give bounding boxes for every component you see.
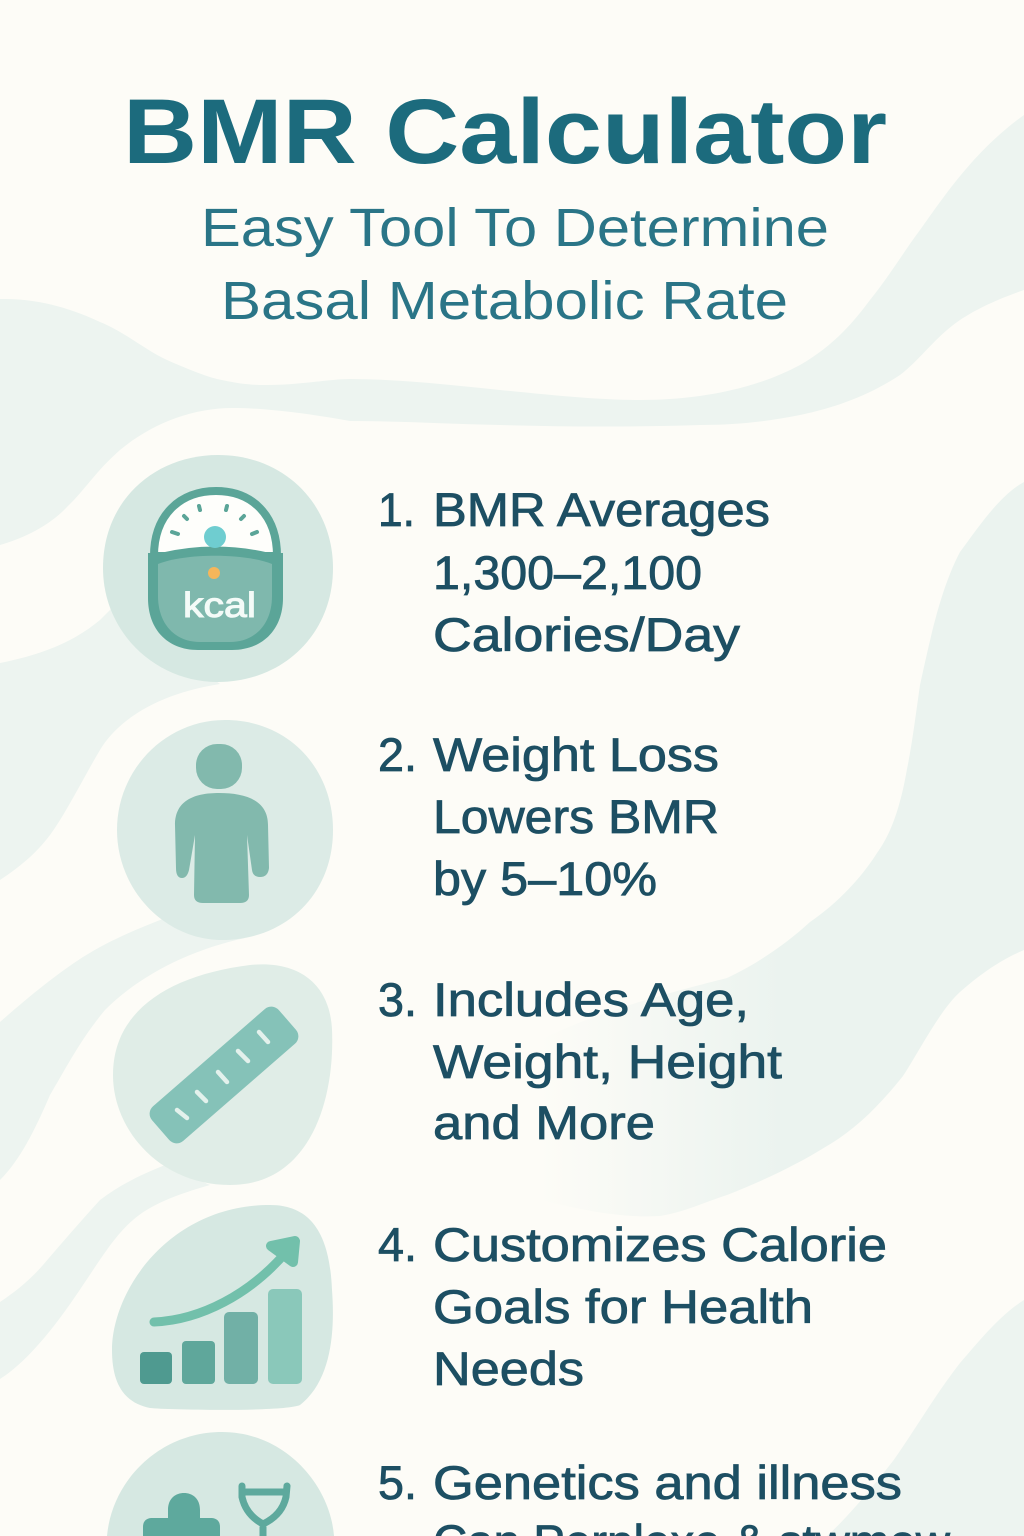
icon: kcal scale [103,455,333,682]
item 2 text [378,728,719,905]
item 1 text [378,483,770,661]
icon: medical cross and stethoscope [107,1432,334,1536]
item 5 text [378,1456,951,1536]
item 1 text: 1,300–2,100 [433,546,702,599]
item 2 text: Lowers BMR [433,790,719,843]
icon: rising bar chart [112,1205,333,1410]
item 4 text: Goals for Health [433,1280,813,1333]
item 1 text: BMR Averages [433,483,770,536]
item 3 text [378,973,782,1149]
subtitle: Basal Metabolic Rate [221,271,788,331]
icon: ruler [113,964,332,1185]
item 3 text: 3. [378,973,417,1026]
item 3 text: and More [433,1096,655,1149]
item 3 text: Includes Age, [433,973,749,1026]
icon: kcal scale: kcal [183,586,256,625]
item 4 text: Customizes Calorie [433,1218,887,1271]
item 4 text: Needs [433,1342,584,1395]
subtitle: Easy Tool To Determine [201,198,829,258]
item 5 text: Genetics and illness [433,1456,902,1509]
item 4 text [378,1218,887,1395]
item 2 text: by 5–10% [433,852,657,905]
icon: person [117,720,333,940]
item 5 text: 5. [378,1456,417,1509]
title: BMR Calculator [123,81,887,183]
item 2 text: Weight Loss [433,728,719,781]
subtitle [201,198,829,331]
item 1 text: 1. [378,483,415,536]
item 2 text: 2. [378,728,417,781]
item 4 text: 4. [378,1218,417,1271]
item 1 text: Calories/Day [433,608,741,661]
item 3 text: Weight, Height [433,1035,782,1088]
